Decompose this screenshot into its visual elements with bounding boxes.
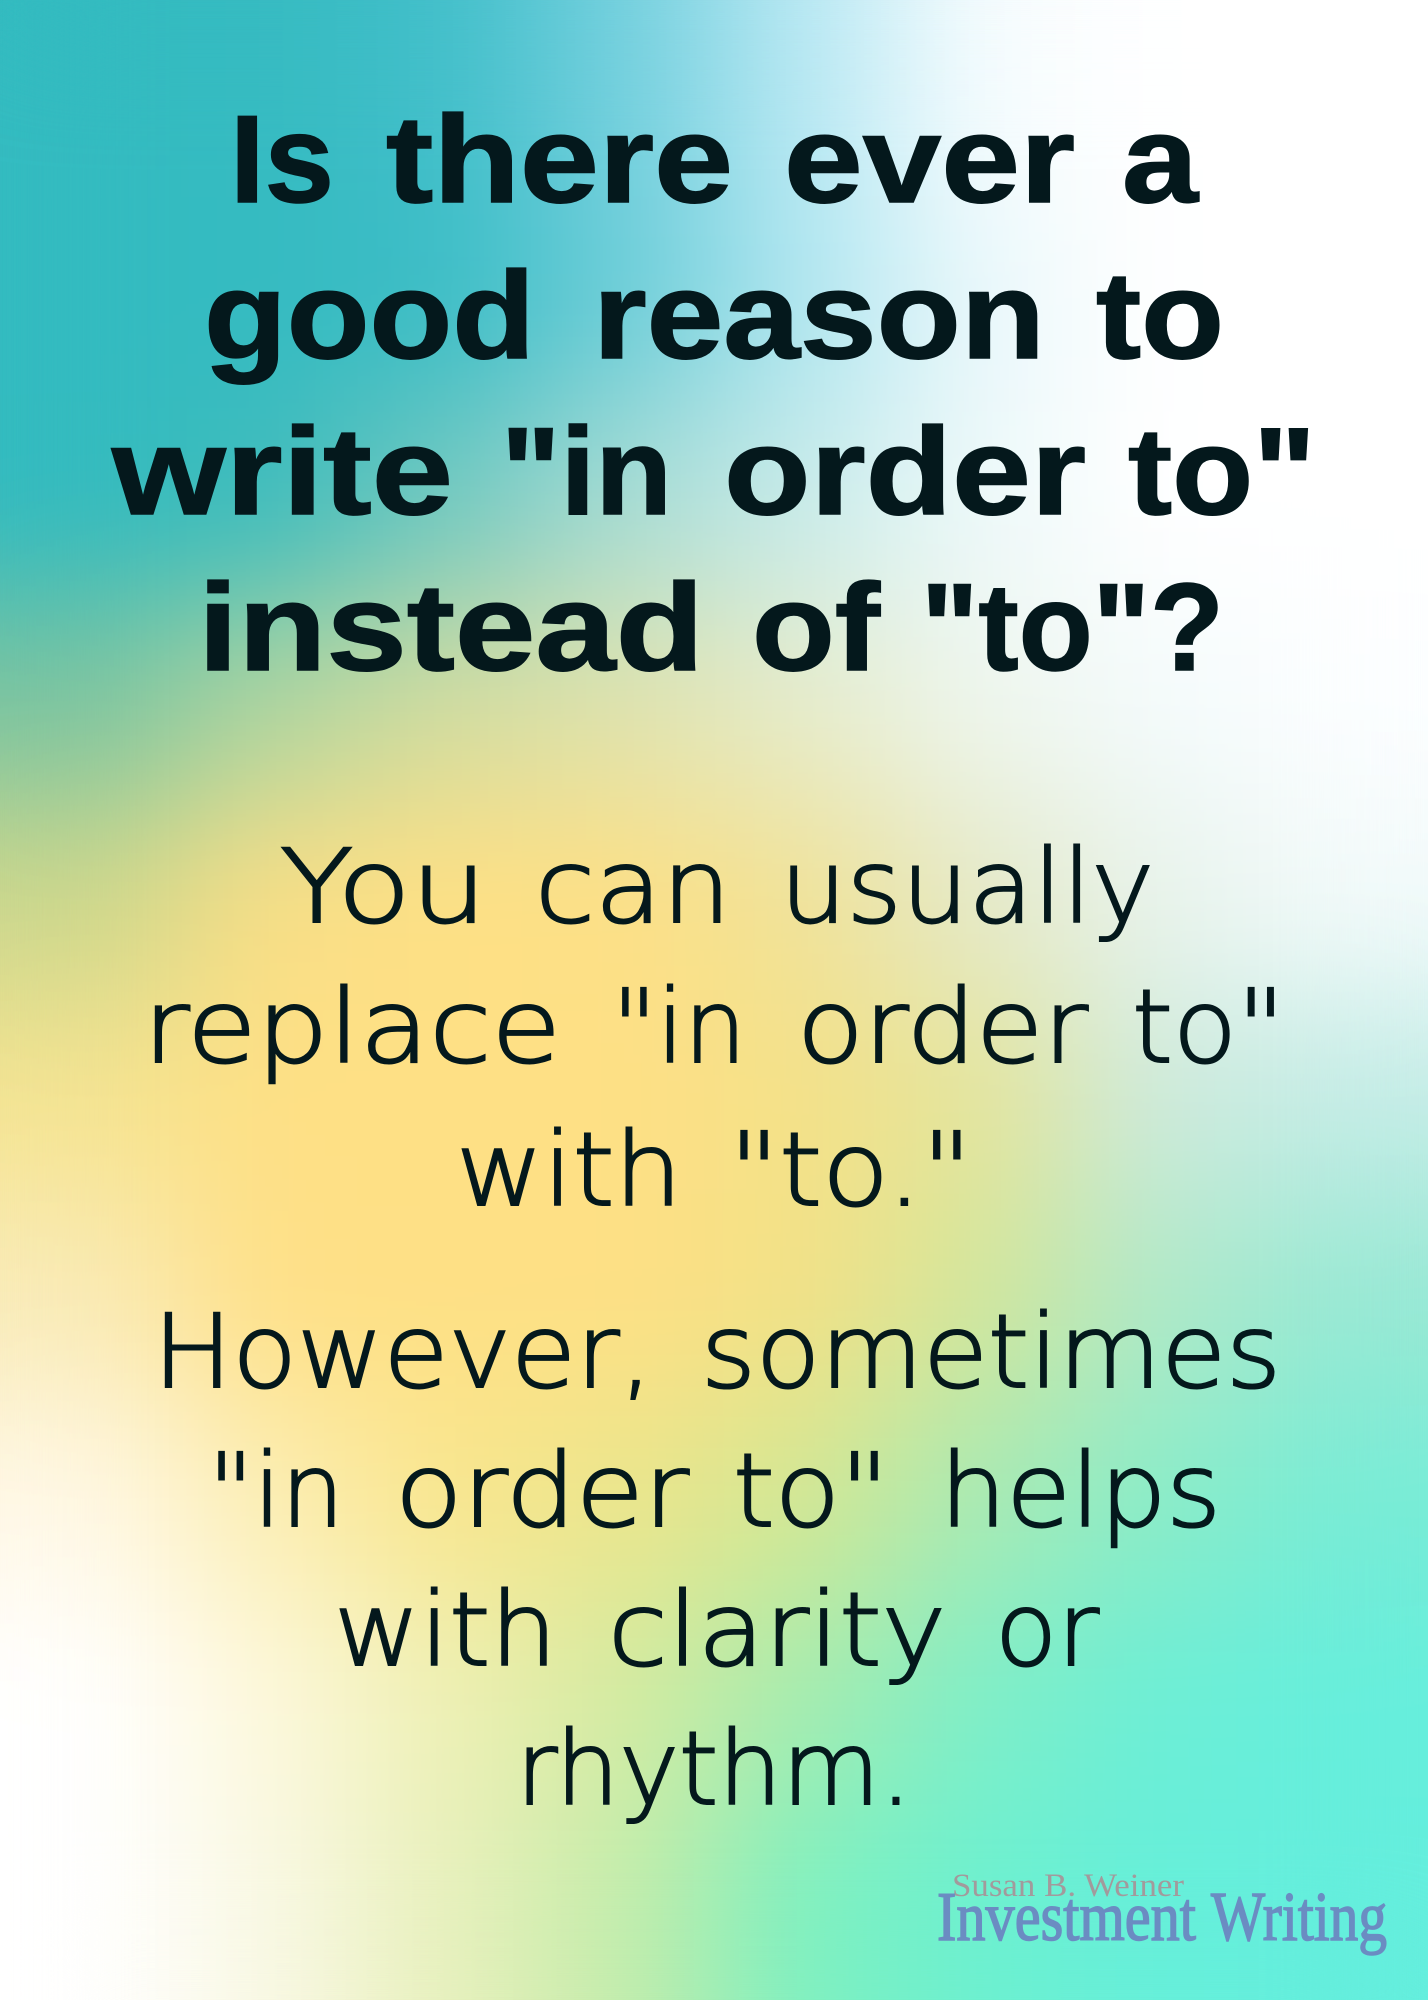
text block: second statement: "in — [208, 1432, 344, 1551]
text block: second statement: rhythm. — [516, 1710, 912, 1829]
text block: second statement: or — [995, 1571, 1099, 1690]
title: order — [724, 403, 1086, 541]
title: instead — [198, 559, 704, 697]
text block: first statement — [143, 828, 1285, 1230]
logo: Susan B. Weiner Investment Writing: Writing — [1211, 1879, 1387, 1956]
title: "in — [501, 403, 672, 541]
logo: Susan B. Weiner Investment Writing — [937, 1868, 1387, 1956]
text block: second statement: However, — [153, 1293, 653, 1412]
title — [111, 91, 1316, 697]
title: there — [386, 91, 733, 229]
text block: first statement: "to." — [729, 1111, 972, 1230]
title: to — [1096, 247, 1224, 385]
text block: second statement: helps — [940, 1432, 1221, 1551]
text block: first statement: "in — [612, 968, 746, 1087]
logo: Susan B. Weiner Investment Writing: Susan B. Weiner — [952, 1868, 1184, 1904]
text block: first statement: to" — [1132, 968, 1285, 1087]
title: good — [204, 247, 535, 385]
text block: second statement: order — [395, 1432, 689, 1551]
title: reason — [593, 247, 1045, 385]
text block: first statement: usually — [780, 828, 1154, 947]
text block: first statement: replace — [143, 968, 561, 1087]
text block: second statement: to" — [733, 1432, 889, 1551]
title: Is — [230, 91, 334, 229]
text block: second statement — [153, 1293, 1281, 1829]
title: write — [111, 403, 453, 541]
text block: second statement: clarity — [608, 1571, 946, 1690]
title: "to"? — [921, 559, 1224, 697]
text block: first statement: You — [280, 828, 487, 947]
title: of — [752, 559, 881, 697]
text block: second statement: sometimes — [701, 1293, 1281, 1412]
title: to" — [1128, 403, 1316, 541]
title: a — [1122, 91, 1199, 229]
text block: first statement: with — [456, 1111, 682, 1230]
text block: first statement: order — [797, 968, 1088, 1087]
text block: first statement: can — [535, 828, 731, 947]
text block: second statement: with — [334, 1571, 557, 1690]
title: ever — [784, 91, 1075, 229]
logo: Susan B. Weiner Investment Writing: Investment — [937, 1879, 1196, 1956]
